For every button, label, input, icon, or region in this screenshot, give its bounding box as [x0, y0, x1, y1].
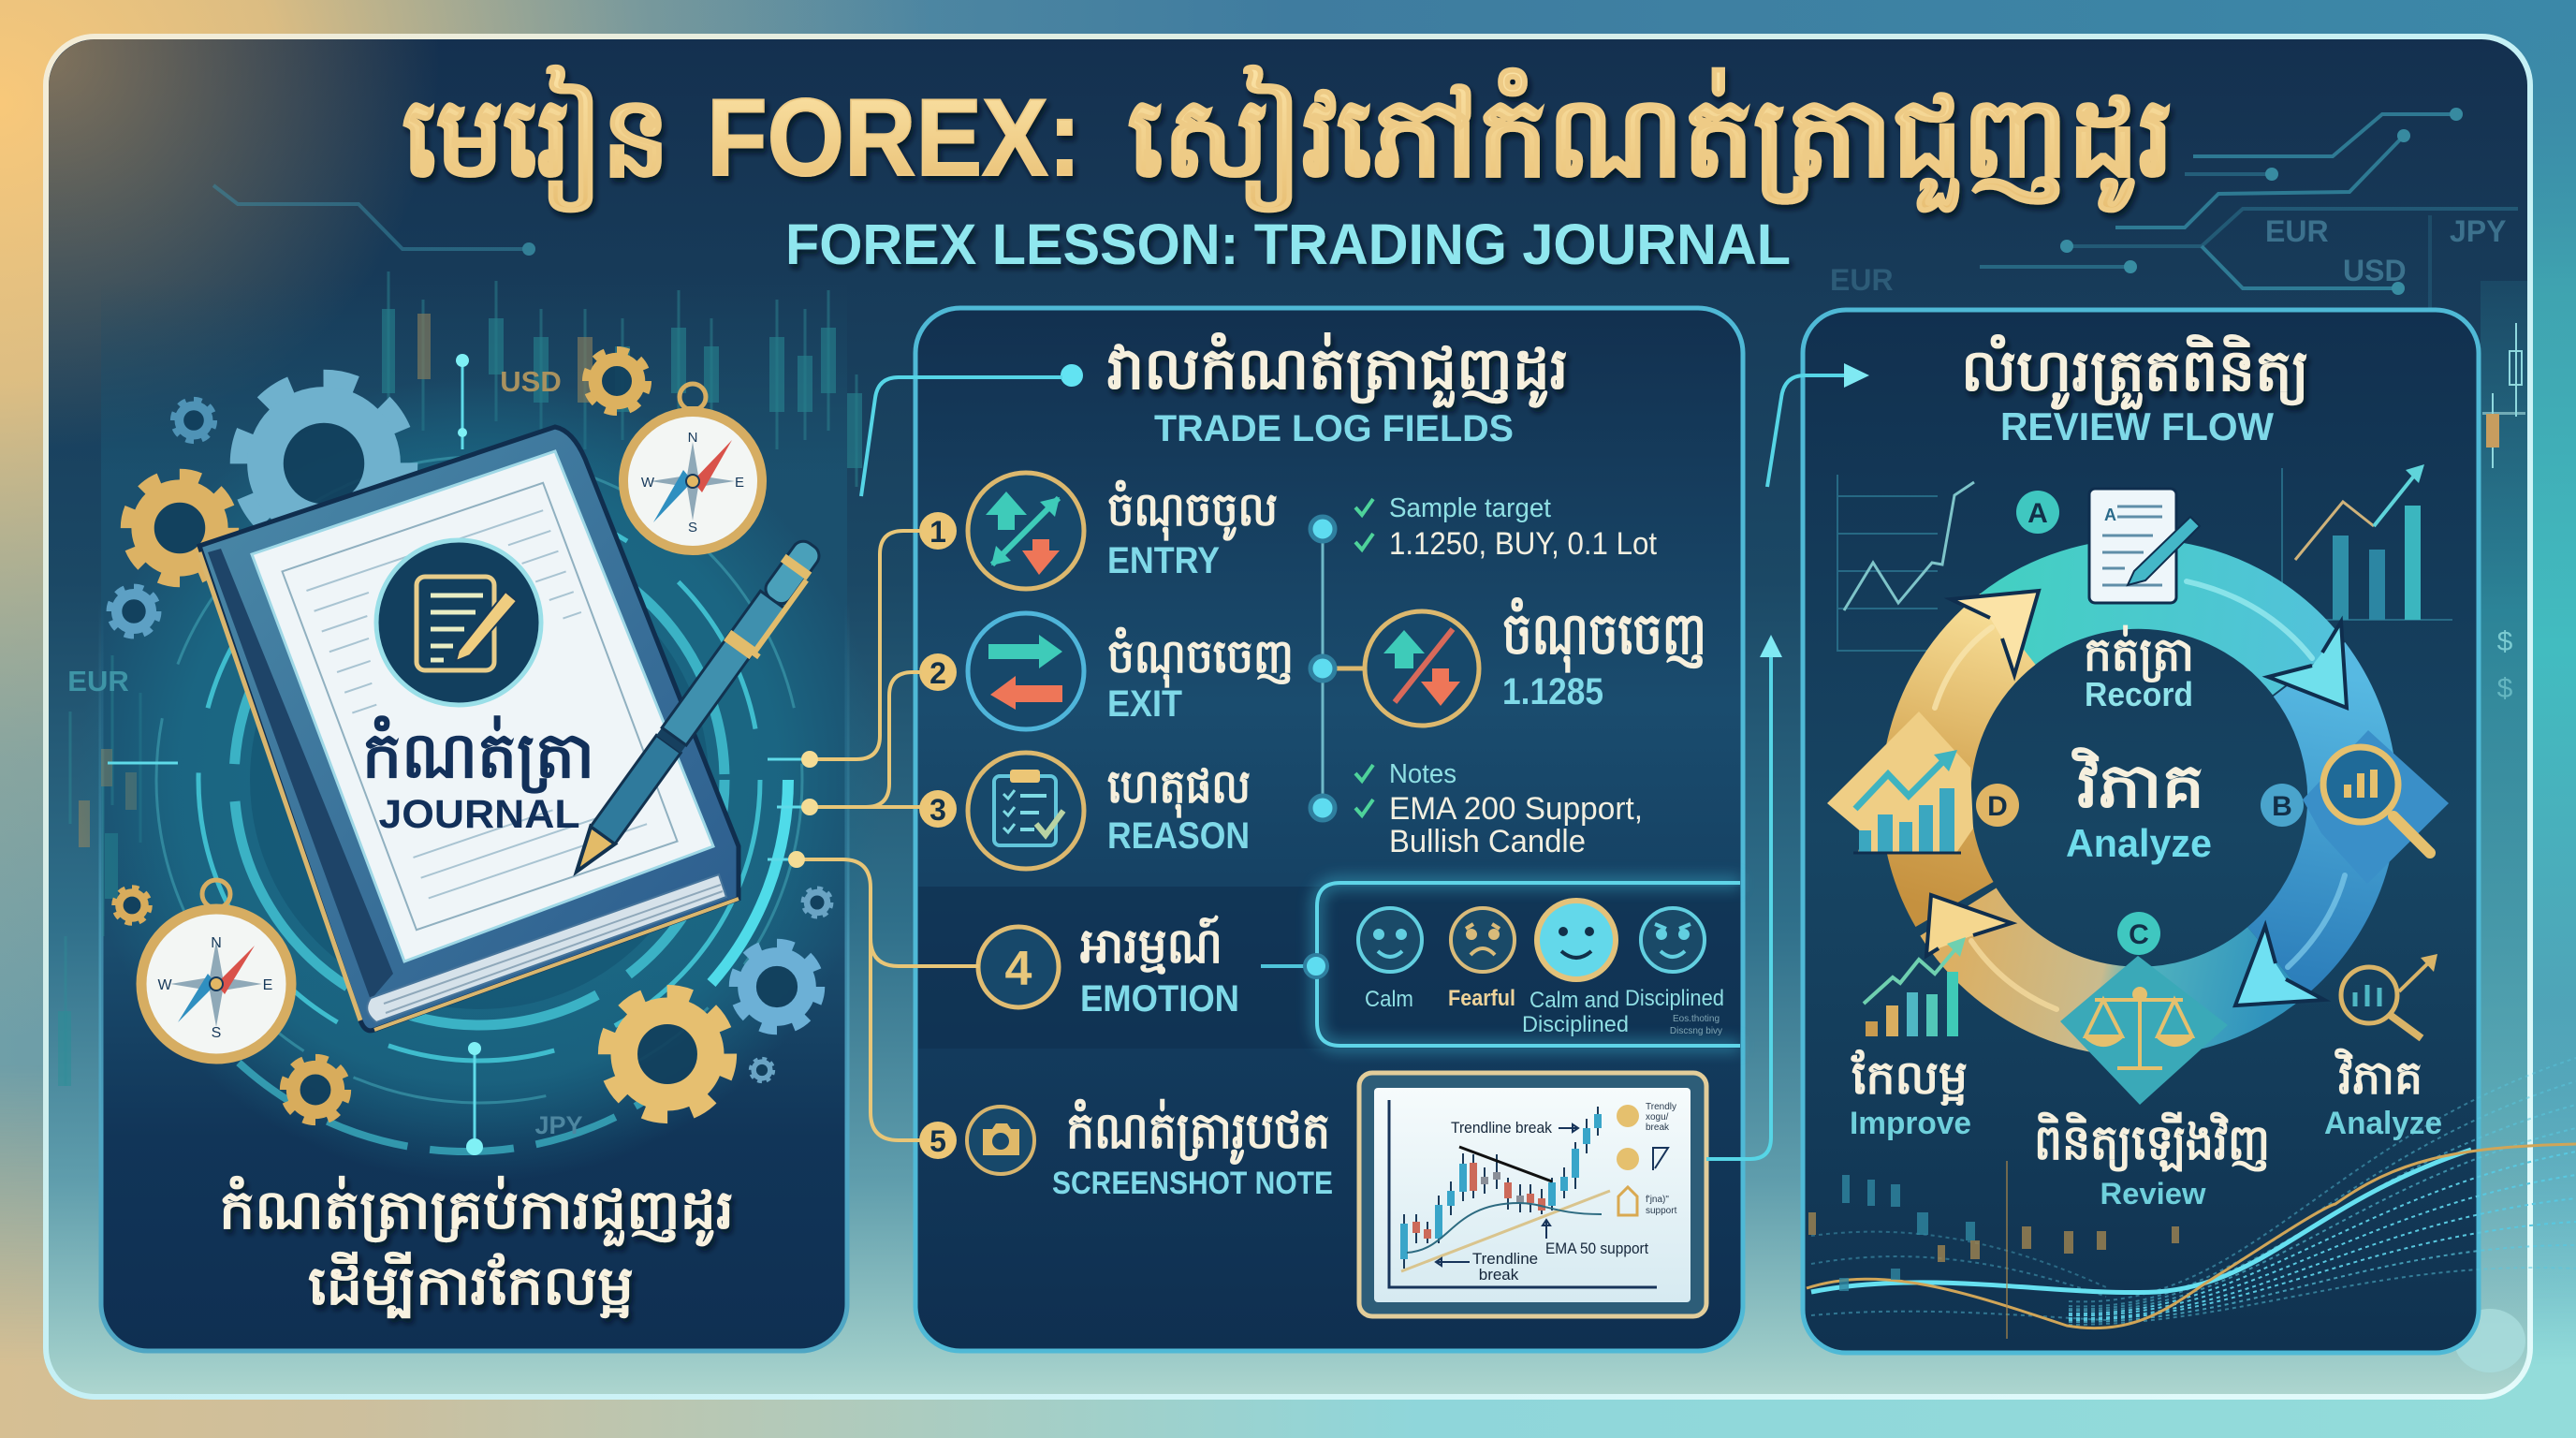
- background circuit lines top right: [1980, 108, 2518, 309]
- icon: compass top: W: [641, 475, 655, 491]
- chart annotations: EMA 50 support: [1545, 1240, 1648, 1257]
- sample target notes: Sample target: [1389, 493, 1551, 523]
- step C labels: [2034, 1111, 2270, 1211]
- background currency labels: EUR: [1830, 263, 1894, 297]
- chart lines: [1401, 1124, 1610, 1271]
- icon: reason clipboard: [968, 753, 1084, 869]
- emotion labels: Eos.thoting: [1673, 1014, 1720, 1024]
- panel: trade log fields: [915, 308, 1743, 1351]
- label: emotion: អារម្មណ៍: [1080, 915, 1222, 975]
- step A labels: កត់ត្រា: [2084, 624, 2194, 682]
- step C labels: ពិនិត្យឡើងវិញ: [2034, 1111, 2270, 1172]
- emotion selector box: [1261, 883, 1740, 1046]
- label: entry: [1107, 479, 1278, 581]
- step A labels: [2084, 624, 2194, 713]
- panel: review flow: [1803, 310, 2576, 1353]
- label: entry: ចំណុចចូល: [1107, 479, 1278, 541]
- sample target notes: [1355, 493, 1658, 562]
- icon: exit: [968, 613, 1084, 729]
- emotion labels: [1365, 986, 1724, 1037]
- icon: camera: [967, 1107, 1034, 1174]
- label: reason: REASON: [1107, 815, 1250, 857]
- screenshot chart card: [1359, 1073, 1706, 1316]
- emotion labels: Calm: [1365, 987, 1413, 1012]
- background currency labels: [1830, 214, 2506, 297]
- emotion labels: Discsng bivy: [1670, 1026, 1722, 1036]
- candlesticks: [1400, 1107, 1602, 1269]
- face: calm and disciplined: [1537, 901, 1616, 979]
- reason notes: Notes: [1389, 759, 1456, 789]
- step D: improve diamond: [1827, 712, 2019, 853]
- notebook: [199, 427, 739, 1031]
- icon: pen: [564, 536, 830, 885]
- chart side legend: xogu/: [1646, 1112, 1669, 1123]
- main title Khmer and FOREX: សៀវភៅកំណត់ត្រាជួញដូរ: [1128, 65, 2174, 213]
- main title Khmer and FOREX: មេរៀន: [402, 65, 669, 213]
- number badge 4: [978, 927, 1059, 1007]
- background circuit line top left: [213, 185, 535, 256]
- panel: left journal: [58, 271, 882, 1351]
- exit value text: 1.1285: [1502, 671, 1603, 712]
- heading English: TRADE LOG FIELDS: [1154, 408, 1514, 449]
- icon: compass top: E: [735, 475, 744, 491]
- icon: blue gear right: [737, 946, 817, 1027]
- emotion band: [918, 887, 1740, 1049]
- arc highlights: [1935, 581, 2345, 1009]
- number badge 2: [919, 653, 957, 691]
- icon: compass top: S: [688, 520, 697, 536]
- exit value icon: [1365, 611, 1479, 726]
- label: screenshot note: [1052, 1098, 1333, 1201]
- main title Khmer and FOREX: FOREX:: [707, 76, 1081, 198]
- label: screenshot note: កំណត់ត្រារូបថត: [1066, 1098, 1330, 1165]
- currency label JPY: JPY: [534, 1111, 583, 1139]
- icon: compass top: N: [688, 430, 697, 446]
- icon: compass bottom: [141, 880, 291, 1059]
- arc: review to improve: [1958, 912, 2276, 1012]
- arc: record to analyze: [2003, 584, 2308, 668]
- heading Khmer: លំហូរត្រួតពិនិត្យ: [1961, 334, 2309, 410]
- step A: record icon: A: [2027, 498, 2048, 529]
- connector: cyan line to trade log heading: [861, 377, 1062, 496]
- main title Khmer and FOREX: [402, 65, 2174, 213]
- chart annotations: [1451, 1119, 1648, 1284]
- sample target notes: 1.1250, BUY, 0.1 Lot: [1389, 526, 1658, 562]
- journal title English: JOURNAL: [378, 792, 580, 837]
- background currency labels: JPY: [2450, 214, 2506, 248]
- label: exit: [1107, 626, 1294, 725]
- step B: analyze diamond: B: [2272, 791, 2292, 822]
- center label: វិភាគ: [2071, 747, 2204, 820]
- small improve chart: [1864, 937, 1966, 1036]
- journal caption: [219, 1175, 734, 1319]
- label: screenshot note: SCREENSHOT NOTE: [1052, 1166, 1333, 1201]
- currency label USD: USD: [500, 365, 562, 398]
- reason notes: Bullish Candle: [1389, 824, 1586, 859]
- background currency labels: EUR: [2265, 214, 2329, 248]
- icon: blue gear left: [110, 588, 157, 635]
- face: disciplined: [1641, 908, 1705, 972]
- number badge 5: [919, 1122, 957, 1159]
- reason notes: EMA 200 Support,: [1389, 791, 1643, 827]
- icon: compass bottom: W: [157, 977, 172, 993]
- icon: gold gear top: [588, 352, 646, 410]
- currency label EUR: EUR: [67, 665, 129, 697]
- journal caption: កំណត់ត្រាគ្រប់ការជួញដូរ: [219, 1175, 734, 1247]
- number badge 1: [919, 512, 957, 550]
- connectors: gold lines from journal to fields: [788, 531, 979, 1140]
- step A: record icon: A: [2104, 506, 2116, 524]
- concentric glow arcs: [156, 457, 802, 1152]
- step C: review diamond: C: [2129, 919, 2149, 950]
- icon: compass bottom: E: [263, 977, 272, 993]
- icon: scales: [2086, 988, 2192, 1068]
- small analyze magnifier: [2341, 954, 2437, 1038]
- exit value text: [1502, 597, 1706, 712]
- mini line chart: [1837, 475, 1974, 651]
- journal circle icon: [376, 540, 541, 705]
- step D: improve diamond: D: [1987, 791, 2008, 822]
- journal title Khmer: កំណត់ត្រា: [362, 715, 594, 794]
- step D labels: Improve: [1850, 1106, 1971, 1141]
- emotion labels: Fearful: [1448, 986, 1515, 1011]
- emotion labels: Disciplined: [1522, 1012, 1629, 1037]
- mini bar chart: [2282, 464, 2452, 620]
- icon: gold gear left: [130, 478, 229, 578]
- arc: improve to record: [1925, 629, 2008, 904]
- right margin decorations: [2454, 323, 2525, 1372]
- step D labels: កែលម្អ: [1851, 1049, 1968, 1106]
- timeline: [1310, 517, 1367, 820]
- connector: cyan line to review flow: [1706, 363, 1869, 1159]
- label: reason: [1107, 760, 1251, 857]
- heading Khmer: វាលកំណត់ត្រាជួញដូរ: [1106, 332, 1569, 408]
- icon: small gold gear: [115, 888, 149, 922]
- icon: gold gear bottom: [285, 1060, 345, 1120]
- reason notes: [1355, 759, 1643, 859]
- wave background: [1807, 1058, 2576, 1339]
- step B labels: វិភាគ: [2334, 1048, 2422, 1104]
- label: exit: EXIT: [1107, 683, 1182, 725]
- center label: [2066, 747, 2212, 865]
- icon: large blue gear: [244, 384, 403, 543]
- chart annotations: Trendline break: [1451, 1119, 1552, 1137]
- number badge 1: 1: [929, 515, 946, 549]
- heading English: REVIEW FLOW: [2000, 404, 2274, 448]
- connector glows: [108, 354, 810, 1155]
- exit value text: ចំណុចចេញ: [1502, 597, 1706, 673]
- emotion labels: Disciplined: [1625, 986, 1724, 1011]
- icon: small blue gear: [174, 401, 213, 440]
- step B labels: [2324, 1048, 2442, 1141]
- notebook page lines: [282, 483, 678, 930]
- chart annotations: Trendline: [1472, 1250, 1538, 1268]
- subtitle: FOREX LESSON: TRADING JOURNAL: [785, 213, 1791, 276]
- step A: record icon: [2016, 489, 2200, 603]
- icon: tiny blue gear: [751, 1059, 773, 1081]
- center label: Analyze: [2066, 821, 2212, 865]
- background candlesticks: [58, 271, 862, 1086]
- label: emotion: [1080, 915, 1239, 1020]
- right margin decorations: $: [2497, 673, 2513, 704]
- number badge 3: [919, 790, 957, 828]
- journal caption: ដើម្បីការកែលម្អ: [308, 1251, 634, 1319]
- step A labels: Record: [2085, 675, 2193, 713]
- icon: compass bottom: S: [212, 1025, 221, 1041]
- step B: analyze diamond: [2261, 730, 2449, 884]
- right margin decorations: $: [2497, 626, 2513, 657]
- face: fearful: [1451, 908, 1515, 972]
- emotion labels: Calm and: [1530, 988, 1619, 1013]
- step C: review diamond: [2060, 912, 2228, 1105]
- chart side legend: [1617, 1102, 1677, 1216]
- arc: analyze to review: [2276, 669, 2352, 961]
- face: calm: [1358, 908, 1422, 972]
- glowing heading dot: [1061, 364, 1083, 387]
- background currency labels: USD: [2343, 254, 2407, 287]
- chart side legend: break: [1646, 1123, 1670, 1133]
- icon: big gold gear: [608, 995, 726, 1113]
- label: entry: ENTRY: [1107, 540, 1220, 581]
- chart side legend: f'jna)": [1646, 1195, 1669, 1205]
- review cycle ring: [1925, 581, 2352, 1012]
- label: reason: ហេតុផល: [1107, 760, 1251, 818]
- icon: entry: [968, 473, 1084, 589]
- number badge 2: 2: [929, 656, 946, 690]
- chart side legend: support: [1646, 1206, 1677, 1216]
- icon: small blue gear right: [803, 888, 831, 917]
- icon: compass top: [623, 384, 762, 550]
- number badge 4: 4: [1005, 942, 1032, 996]
- label: exit: ចំណុចចេញ: [1107, 626, 1294, 688]
- label: emotion: EMOTION: [1080, 978, 1239, 1020]
- arrowheads: [1926, 591, 2347, 1005]
- number badge 3: 3: [929, 793, 946, 827]
- icon: compass bottom: N: [211, 935, 222, 951]
- chart annotations: break: [1479, 1266, 1519, 1284]
- chart side legend: Trendly: [1646, 1102, 1676, 1112]
- step B labels: Analyze: [2324, 1106, 2442, 1141]
- number badge 5: 5: [929, 1124, 946, 1158]
- chart axes: [1389, 1100, 1657, 1287]
- step C labels: Review: [2100, 1177, 2206, 1211]
- teal glow disc: [77, 377, 882, 1182]
- step D labels: [1850, 1049, 1971, 1141]
